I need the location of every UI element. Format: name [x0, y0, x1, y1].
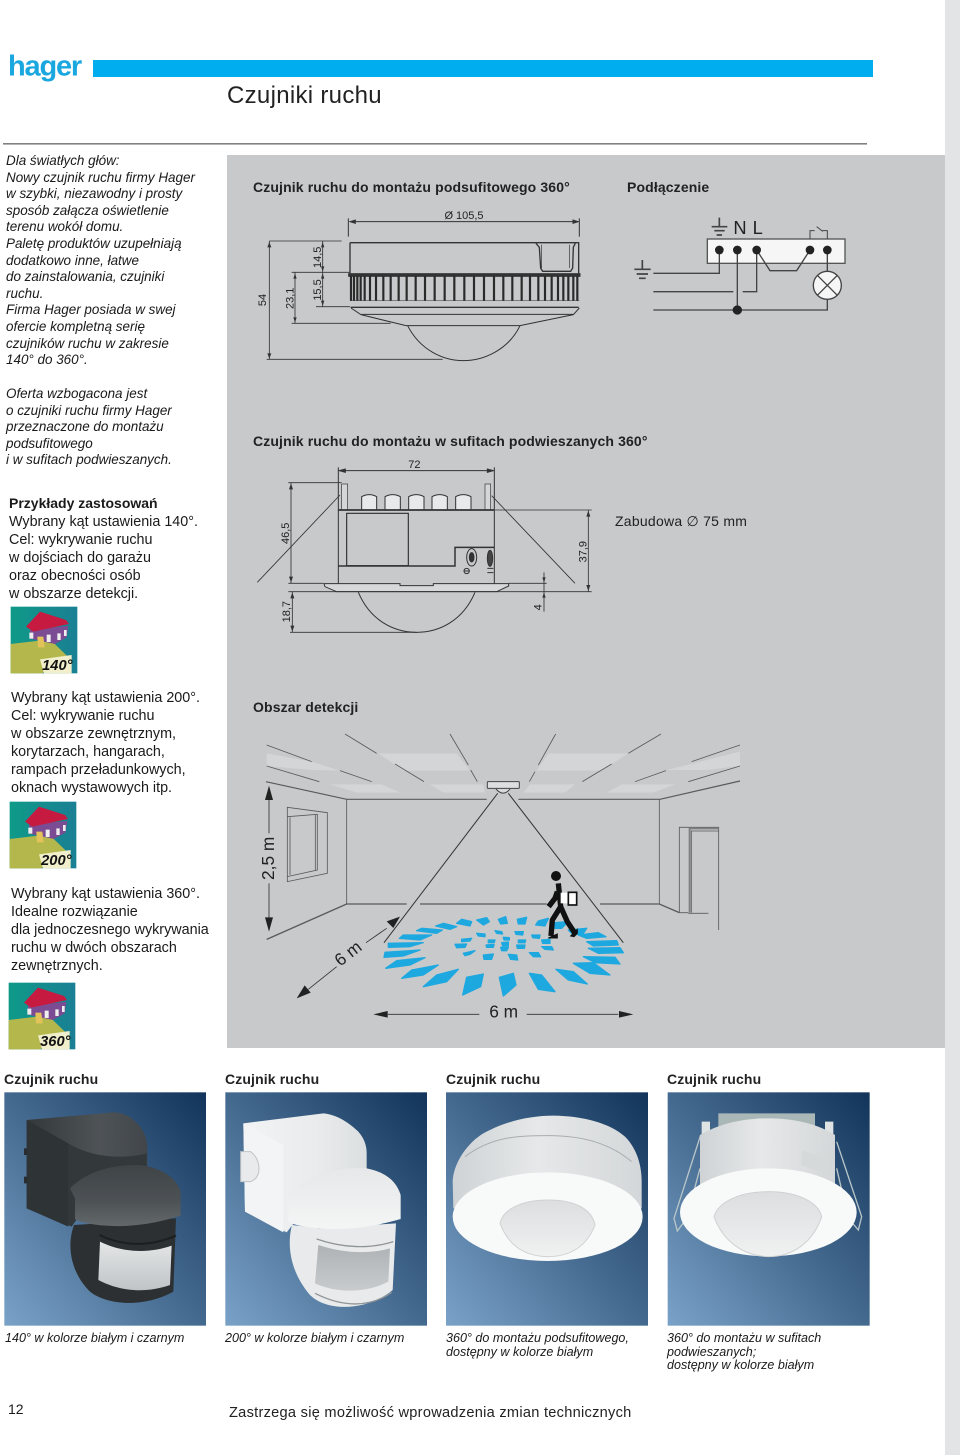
product heading 3: Czujnik ruchu — [446, 1071, 540, 1087]
product heading 4: Czujnik ruchu — [667, 1071, 761, 1087]
text: applications 200: Wybrany kąt ustawienia 200°. Cel: wykrywanie ruchu w obszarze zewnętrznym, korytarzach, hangarach, rampach przeładunkowych, oknach wystawowych itp. — [11, 690, 200, 796]
ceiling light panels — [267, 752, 740, 793]
diagram: wiring: L — [753, 217, 763, 238]
title: Czujniki ruchu — [227, 82, 382, 109]
caption 3: 360° do montażu podsufitowego, dostępny w kolorze białym — [446, 1331, 629, 1359]
product heading 2: Czujnik ruchu — [225, 1071, 319, 1087]
diagram: wiring — [634, 217, 845, 315]
photo: white sensor 200 — [225, 1092, 427, 1326]
diagram: detection area room: 6 m — [489, 1002, 518, 1022]
header bar — [93, 60, 873, 77]
diagram: surface mounted sensor: 54 — [257, 294, 269, 306]
diagram: surface mounted sensor: 15,5 — [312, 279, 324, 301]
caption 4: 360° do montażu w sufitach podwieszanych; dostępny w kolorze białym — [667, 1331, 821, 1372]
caption 2: 200° w kolorze białym i czarnym — [225, 1331, 404, 1345]
icon: house 140: 140° — [42, 658, 73, 674]
photo: black sensor 140 — [4, 1092, 206, 1326]
heading: surface mounted: Czujnik ruchu do montażu podsufitowego 360° — [253, 179, 570, 195]
diagram: surface mounted sensor: 23,1 — [284, 288, 296, 309]
heading: recessed: Czujnik ruchu do montażu w sufitach podwieszanych 360° — [253, 433, 648, 449]
heading: detection area: Obszar detekcji — [253, 699, 358, 715]
text: intro: Dla światłych głów: Nowy czujnik ruchu firmy Hager w szybki, niezawodny i prosty sposób załącza oświetlenie terenu wokół domu. Paletę produktów uzupełniają dodatkowo inne, łatwe do zainstalowania, czujniki ruchu. Firma Hager posiada w swej ofercie kompletną serię czujników ruchu w zakresie 140° do 360°. — [6, 153, 195, 367]
text: offer: Oferta wzbogacona jest o czujniki ruchu firmy Hager przeznaczone do montażu podsufitowego i w sufitach podwieszanych. — [6, 386, 172, 467]
person — [548, 871, 577, 938]
text: applications 360: Wybrany kąt ustawienia 360°. Idealne rozwiązanie dla jednoczesnego wykrywania ruchu w dwóch obszarach zewnętrznych. — [11, 886, 209, 974]
photo: surface mounted sensor 360 — [446, 1092, 648, 1326]
header rule — [3, 143, 867, 145]
caption 1: 140° w kolorze białym i czarnym — [5, 1331, 184, 1345]
grey diagram panel — [227, 155, 945, 1048]
diagram: surface mounted sensor — [257, 210, 580, 361]
icon: house 140 — [11, 607, 77, 674]
diagram: ceiling recessed sensor: 37,9 — [578, 541, 590, 562]
product heading 1: Czujnik ruchu — [4, 1071, 98, 1087]
diagram: ceiling recessed sensor: 72 — [408, 459, 420, 471]
diagram: ceiling recessed sensor: 4 — [532, 604, 544, 610]
icon: house 200: 200° — [40, 853, 72, 869]
diagram: detection area room: 2,5 m — [258, 837, 278, 880]
floor detection pattern — [384, 917, 623, 996]
heading: connection: Podłączenie — [627, 179, 709, 195]
diagram: ceiling recessed sensor: 18,7 — [281, 601, 293, 622]
photo: recessed sensor 360 — [668, 1092, 870, 1326]
diagram: surface mounted sensor: 14,5 — [312, 247, 324, 268]
diagram: surface mounted sensor: Ø 105,5 — [444, 210, 484, 222]
icon: house 360 — [9, 983, 75, 1050]
icon: house 360: 360° — [40, 1034, 71, 1050]
icon: house 200 — [10, 802, 76, 869]
page number: 12 — [8, 1401, 24, 1417]
dimension arrows — [265, 786, 633, 1018]
diagram: detection area room: 6 m — [330, 936, 366, 970]
text: applications 140: Przykłady zastosowań Wybrany kąt ustawienia 140°. Cel: wykrywanie ruchu w dojściach do garażu oraz obecności osób w obszarze detekcji. — [9, 495, 198, 602]
diagram: wiring: N — [733, 217, 747, 238]
diagram: detection area room — [258, 734, 740, 1022]
text: installation: Zabudowa ∅ 75 mm — [615, 513, 747, 529]
footer note: Zastrzega się możliwość wprowadzenia zmian technicznych — [229, 1405, 632, 1421]
diagram: ceiling recessed sensor: 46,5 — [280, 523, 292, 544]
right margin strip — [945, 0, 960, 1455]
diagram: ceiling recessed sensor — [257, 459, 592, 632]
logo: hager: hager — [8, 50, 82, 82]
